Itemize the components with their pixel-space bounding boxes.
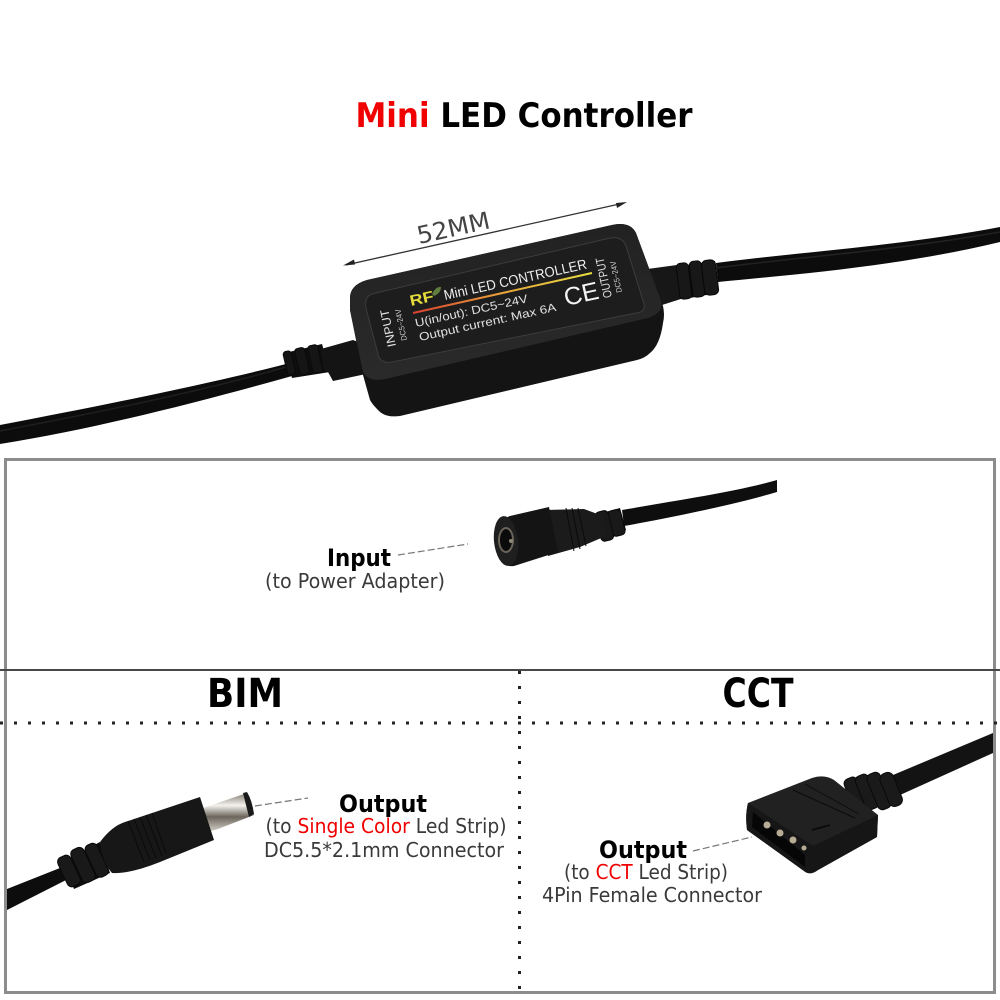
connector spec: DC5.5*2.1mm Connector bbox=[264, 838, 505, 862]
icon: female DC connector bbox=[491, 480, 777, 567]
label: INPUT: INPUT bbox=[377, 308, 399, 348]
connector spec: 4Pin Female Connector bbox=[542, 883, 763, 907]
label: input voltage: DC5~24V bbox=[393, 308, 409, 341]
title: Mini LED Controller bbox=[356, 96, 693, 136]
label: voltage: U(in/out): DC5~24V bbox=[414, 293, 529, 330]
cable: left input bbox=[0, 340, 366, 444]
printed label bbox=[377, 256, 624, 348]
sub-label: (to Power Adapter) bbox=[265, 569, 445, 593]
cable: right output bbox=[640, 227, 1000, 305]
dimension: 52MM bbox=[343, 202, 627, 266]
coloured stripe bbox=[413, 273, 592, 313]
label panel bbox=[366, 238, 644, 362]
label: output voltage: DC5~24V bbox=[608, 260, 624, 293]
controller with cables bbox=[0, 224, 1000, 444]
controller body bbox=[350, 224, 664, 416]
RF logo: RF bbox=[408, 288, 435, 310]
icon: male DC plug bbox=[7, 792, 254, 910]
panel: input bbox=[265, 480, 777, 593]
label: current: Output current: Max 6A bbox=[418, 302, 558, 344]
label: OUTPUT: OUTPUT bbox=[593, 256, 615, 299]
icon: 4-pin connector bbox=[746, 733, 993, 873]
CE mark: CE bbox=[561, 277, 601, 312]
panel: BIM bbox=[7, 671, 507, 910]
leader line bbox=[255, 798, 308, 806]
sub-label: (to CCT Led Strip) bbox=[564, 860, 728, 884]
heading: BIM: BIM bbox=[207, 671, 283, 717]
panel: CCT bbox=[542, 671, 993, 907]
icon: leaf bbox=[432, 287, 441, 296]
controller top face bbox=[350, 224, 662, 380]
frame bbox=[0, 460, 1000, 992]
label: Mini LED CONTROLLER: Mini LED CONTROLLER bbox=[442, 256, 588, 303]
sub-label: (to Single Color Led Strip) bbox=[266, 814, 507, 838]
label: Output: Output bbox=[599, 836, 687, 864]
dimension: 52MM: 52MM bbox=[414, 207, 493, 250]
leader line bbox=[398, 544, 468, 555]
label: Output: Output bbox=[339, 790, 427, 818]
label: Input: Input bbox=[327, 544, 391, 572]
leader line bbox=[693, 837, 752, 851]
heading: CCT: CCT bbox=[722, 671, 794, 717]
